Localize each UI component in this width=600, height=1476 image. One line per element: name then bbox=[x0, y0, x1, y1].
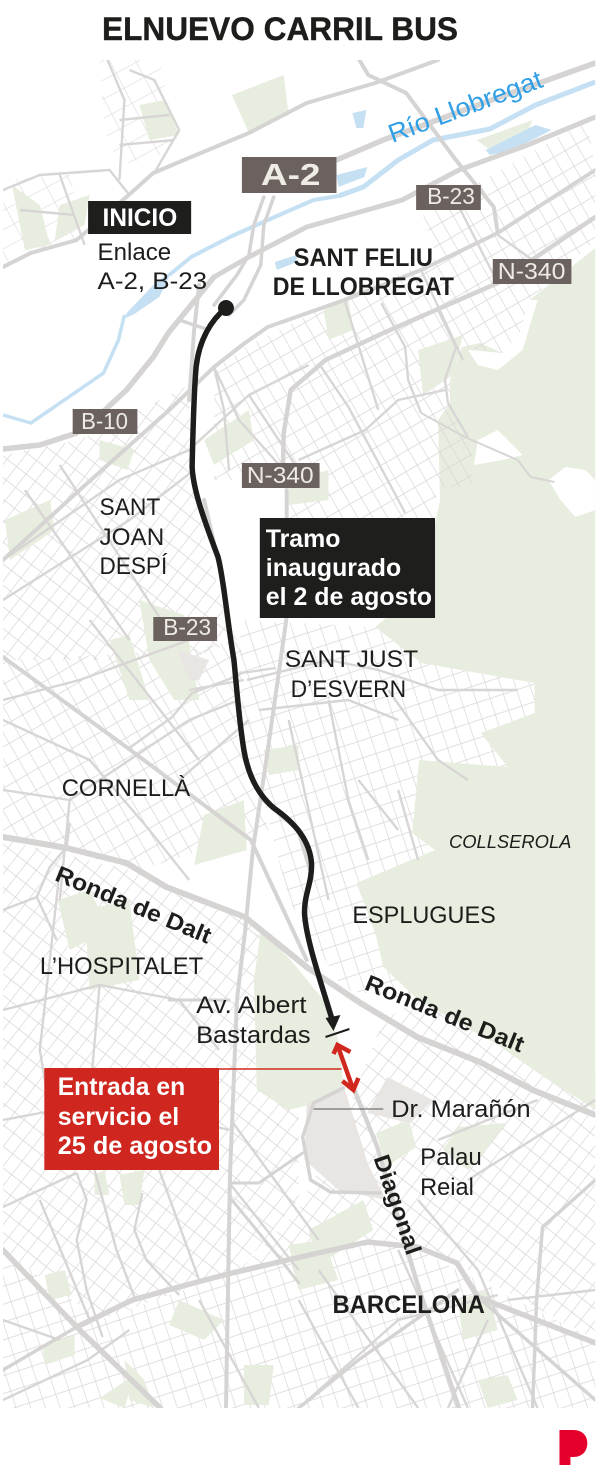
connector line to red callout bbox=[219, 1068, 341, 1070]
label: Río Llobregat: Río Llobregat bbox=[385, 65, 547, 149]
road badge: B-23 south: B-23 bbox=[163, 614, 211, 640]
label: enlace A-2, B-23: A-2, B-23 bbox=[98, 268, 207, 295]
callout: inicio bbox=[88, 201, 191, 234]
road badge: A-2 bbox=[242, 157, 336, 193]
callout: tramo inaugurado bbox=[260, 518, 435, 618]
river Llobregat bbox=[3, 82, 595, 423]
label: Av. Albert Bastardas: Av. Albert bbox=[196, 992, 307, 1019]
label: Sant Feliu de Llobregat bbox=[273, 244, 454, 301]
label: Ronda de Dalt west: Ronda de Dalt bbox=[52, 861, 216, 949]
callout: entrada en servicio: servicio el bbox=[58, 1103, 179, 1131]
red double arrow: new section bbox=[333, 1045, 358, 1090]
road badge: B-23 north: B-23 bbox=[427, 183, 475, 209]
label: Sant Joan Despí bbox=[100, 494, 167, 580]
label: L'Hospitalet: L’HOSPITALET bbox=[40, 953, 203, 980]
label: Sant Joan Despí: SANT bbox=[100, 494, 160, 521]
label: Palau Reial: Palau bbox=[420, 1144, 482, 1171]
marker: Av. Albert Bastardas bbox=[326, 1029, 349, 1037]
label: Esplugues: ESPLUGUES bbox=[352, 902, 496, 929]
callout: entrada en servicio: 25 de agosto bbox=[58, 1132, 212, 1160]
road badge: A-2: A-2 bbox=[261, 157, 321, 192]
route start dot bbox=[218, 300, 234, 316]
label: Sant Just d'Esvern bbox=[285, 646, 418, 703]
route: tramo inaugurado bbox=[192, 300, 340, 1031]
label: Barcelona: BARCELONA bbox=[332, 1291, 485, 1319]
label: Sant Feliu de Llobregat: DE LLOBREGAT bbox=[273, 273, 454, 301]
label: Ronda de Dalt east: Ronda de Dalt bbox=[361, 969, 528, 1057]
label: Collserola: COLLSEROLA bbox=[449, 831, 571, 852]
road badge: N-340 east: N-340 bbox=[498, 258, 565, 284]
label: Sant Just d'Esvern: D’ESVERN bbox=[291, 676, 406, 703]
label: Sant Just d'Esvern: SANT JUST bbox=[285, 646, 418, 673]
label: Palau Reial bbox=[420, 1144, 482, 1201]
leader line: Dr. Marañón bbox=[314, 1108, 384, 1110]
label: Sant Joan Despí: DESPÍ bbox=[100, 553, 167, 580]
label: enlace A-2, B-23 bbox=[98, 239, 207, 295]
callout: inicio: INICIO bbox=[103, 204, 177, 232]
title: ELNUEVO CARRIL BUS bbox=[102, 11, 458, 47]
clearings in the park bbox=[468, 300, 595, 517]
callout: tramo inaugurado: inaugurado bbox=[266, 554, 401, 582]
built areas: Palau Reial campus bbox=[177, 650, 433, 1200]
label: Sant Feliu de Llobregat: SANT FELIU bbox=[294, 244, 433, 272]
callout: tramo inaugurado: el 2 de agosto bbox=[266, 583, 432, 611]
logo: P bbox=[559, 1430, 587, 1465]
park: Collserola bbox=[356, 248, 595, 1105]
label: Dr. Marañón: Dr. Marañón bbox=[391, 1096, 531, 1123]
label: Cornellà: CORNELLÀ bbox=[62, 775, 191, 802]
route end arrowhead bbox=[326, 1015, 340, 1031]
label: Diagonal: Diagonal bbox=[369, 1151, 427, 1258]
label: enlace A-2, B-23: Enlace bbox=[98, 239, 171, 266]
label: Av. Albert Bastardas: Bastardas bbox=[196, 1022, 311, 1049]
label: Sant Joan Despí: JOAN bbox=[100, 524, 164, 551]
callout: entrada en servicio bbox=[44, 1068, 219, 1170]
label: Av. Albert Bastardas bbox=[196, 992, 311, 1049]
road badge: B-10: B-10 bbox=[81, 408, 128, 434]
callout: tramo inaugurado: Tramo bbox=[266, 525, 340, 553]
road badge: N-340 centre: N-340 bbox=[247, 462, 314, 488]
callout: entrada en servicio: Entrada en bbox=[58, 1073, 185, 1101]
label: Palau Reial: Reial bbox=[420, 1174, 474, 1201]
